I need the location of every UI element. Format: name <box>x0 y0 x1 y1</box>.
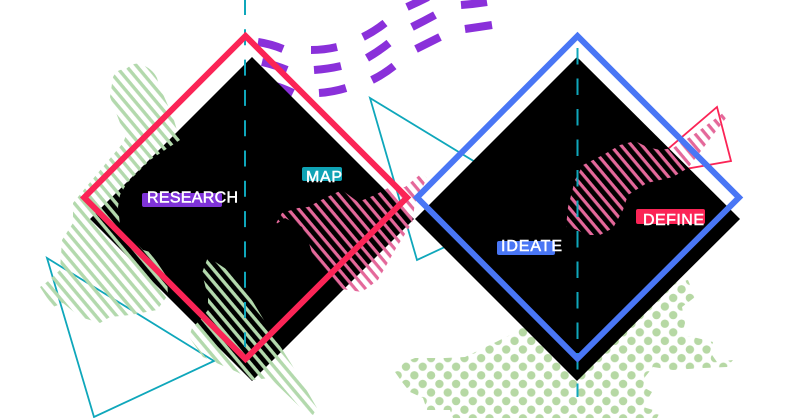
red diamond outline <box>84 36 407 359</box>
teal dashed axis left <box>244 0 246 347</box>
blue diamond outline <box>417 36 739 358</box>
label: research: RESEARCH <box>147 190 238 206</box>
teal triangle centre <box>370 98 541 260</box>
black diamond left <box>90 57 414 381</box>
striped green blob upper left <box>40 64 180 323</box>
striped green blob lower <box>189 257 317 415</box>
striped pink blob right <box>566 113 726 235</box>
purple dashed arcs <box>258 0 492 93</box>
label: map: MAP <box>306 169 342 186</box>
black diamond right <box>415 57 740 381</box>
dotted green blob <box>395 280 733 418</box>
striped pink blob left <box>275 173 427 292</box>
teal triangle lower left <box>47 258 214 417</box>
teal dashed axis right <box>576 48 578 397</box>
red triangle right <box>634 107 731 178</box>
label: define: DEFINE <box>643 212 704 229</box>
label: ideate: IDEATE <box>501 238 562 255</box>
